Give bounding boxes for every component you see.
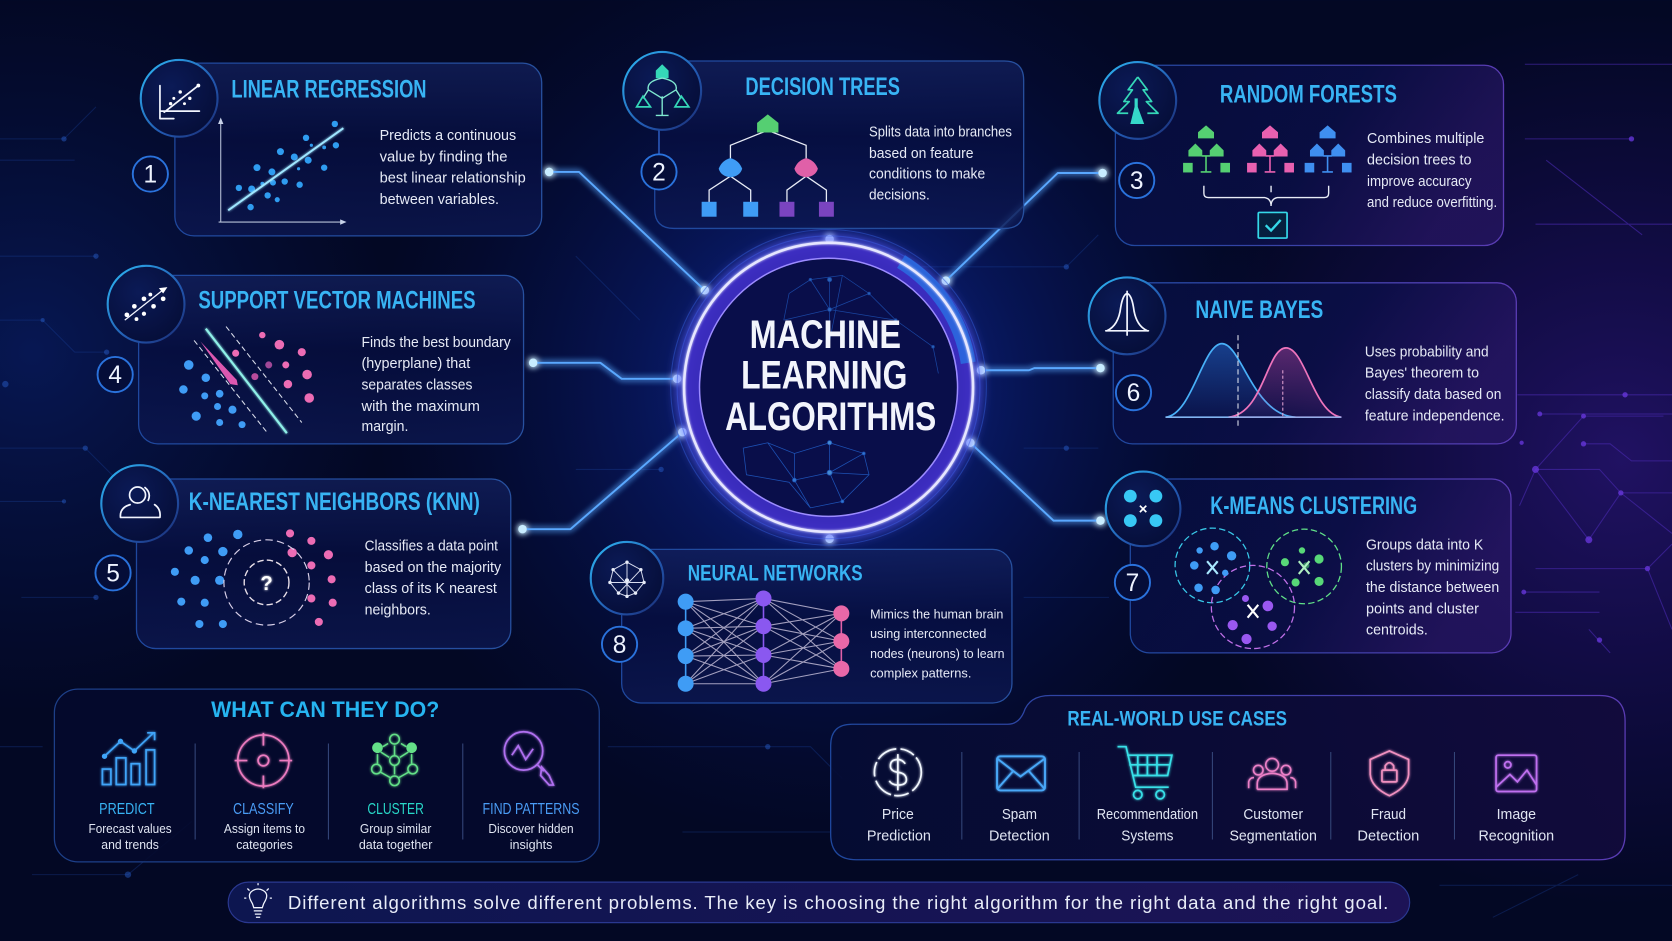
panel: decision trees — [623, 52, 1024, 228]
fraud detection item: Detection — [1357, 828, 1419, 845]
description: class of its K nearest — [365, 580, 498, 597]
number 5 — [95, 555, 131, 590]
classify item: categories — [236, 837, 293, 852]
number 8: 8 — [613, 632, 626, 659]
heading: LINEAR REGRESSION — [231, 76, 427, 103]
chart: ensemble trees — [1184, 126, 1351, 238]
description — [1365, 343, 1505, 424]
hub title: MACHINE — [750, 313, 901, 357]
panel: neural networks — [591, 542, 1012, 703]
image recognition item — [1478, 755, 1554, 845]
icon: neural sphere — [591, 542, 663, 614]
description — [380, 127, 526, 208]
panel: KNN — [95, 465, 511, 649]
predict item: PREDICT — [99, 801, 155, 818]
find patterns item: insights — [510, 837, 553, 852]
customer segmentation item — [1229, 758, 1317, 845]
number 7 — [1115, 565, 1150, 600]
customer segmentation item: Customer — [1243, 806, 1303, 823]
number 1 — [133, 156, 168, 192]
spam detection item: Spam — [1002, 806, 1037, 823]
description — [1367, 130, 1497, 211]
description: complex patterns. — [870, 665, 971, 680]
icon: SVM — [108, 266, 184, 343]
description: based on the majority — [365, 559, 502, 576]
description: nodes (neurons) to learn — [870, 646, 1004, 661]
image recognition item: Image — [1497, 806, 1536, 823]
description: the distance between — [1366, 579, 1499, 596]
icon: clusters — [1106, 472, 1180, 546]
icon: bell curve — [1089, 277, 1165, 354]
number 7: 7 — [1126, 570, 1139, 597]
central hub — [671, 230, 986, 545]
description: improve accuracy — [1367, 173, 1472, 190]
takeaway banner — [228, 882, 1410, 923]
number 2 — [641, 154, 677, 190]
description — [360, 334, 511, 435]
panel: random forests — [1099, 62, 1504, 246]
icon: people — [101, 465, 178, 542]
description: best linear relationship — [380, 170, 526, 187]
description: Mimics the human brain — [870, 607, 1003, 622]
customer segmentation item: Segmentation — [1229, 828, 1317, 845]
hub title: ALGORITHMS — [725, 395, 936, 439]
price prediction item: Prediction — [867, 828, 931, 845]
spam detection item: Detection — [989, 828, 1050, 845]
heading: SUPPORT VECTOR MACHINES — [198, 287, 476, 314]
cluster item: CLUSTER — [367, 801, 424, 818]
description: (hyperplane) that — [361, 355, 471, 372]
description: Bayes' theorem to — [1365, 365, 1479, 382]
number 4 — [98, 357, 133, 392]
number 3 — [1119, 163, 1154, 198]
heading: K-NEAREST NEIGHBORS (KNN) — [189, 489, 480, 516]
icon: decision tree — [623, 52, 701, 130]
panel: k-means clustering — [1106, 472, 1511, 653]
description: points and cluster — [1366, 600, 1479, 617]
description: neighbors. — [365, 601, 431, 618]
heading: WHAT CAN THEY DO? — [211, 697, 439, 722]
description: between variables. — [380, 191, 499, 208]
predict item — [89, 733, 172, 852]
description: with the maximum — [360, 398, 480, 415]
description: Classifies a data point — [365, 537, 499, 554]
chart: nearest neighbours — [171, 529, 337, 628]
description: and reduce overfitting. — [1367, 194, 1497, 211]
heading: RANDOM FORESTS — [1220, 82, 1397, 109]
number 1: 1 — [144, 162, 157, 189]
image recognition item: Recognition — [1478, 828, 1554, 845]
description: conditions to make — [869, 166, 985, 182]
description: based on feature — [869, 146, 974, 162]
number 5: 5 — [106, 560, 120, 587]
chart: clusters — [1175, 528, 1341, 649]
takeaway text: Different algorithms solve different problems. The key is choosing the right algorithm for the right data and the right goal. — [288, 892, 1388, 913]
description: using interconnected — [870, 626, 986, 641]
description: value by finding the — [380, 148, 508, 165]
brain network bottom — [743, 441, 869, 508]
find patterns item — [483, 732, 580, 852]
description: clusters by minimizing — [1366, 558, 1499, 575]
cluster item: data together — [359, 837, 433, 852]
number 6 — [1116, 375, 1151, 410]
chart: regression scatter — [218, 118, 347, 225]
chart: hyperplane — [179, 327, 314, 433]
classify item: Assign items to — [224, 821, 305, 836]
description: Splits data into branches — [869, 125, 1012, 141]
description: separates classes — [361, 376, 472, 393]
number 3: 3 — [1130, 168, 1144, 195]
connector lines — [518, 168, 1107, 543]
chart: neural network — [678, 590, 849, 692]
fraud detection item: Fraud — [1371, 806, 1406, 823]
icon: light bulb — [244, 883, 272, 917]
heading: NEURAL NETWORKS — [688, 560, 863, 585]
description: centroids. — [1366, 622, 1428, 639]
panel: linear regression — [133, 60, 542, 236]
description — [870, 607, 1004, 680]
description: Combines multiple — [1367, 130, 1484, 147]
hub title: LEARNING — [741, 353, 907, 397]
predict item: Forecast values — [89, 821, 172, 836]
cluster item — [359, 734, 433, 852]
chart: nearest neighbours: ? — [260, 573, 273, 595]
panel: support vector machines — [98, 266, 524, 444]
description — [869, 125, 1012, 204]
recommendation systems item — [1097, 747, 1198, 845]
number 6: 6 — [1127, 380, 1140, 407]
description: Finds the best boundary — [361, 334, 511, 351]
description: decision trees to — [1367, 151, 1472, 168]
spam detection item — [989, 756, 1050, 845]
brain network top — [784, 275, 938, 373]
heading: REAL-WORLD USE CASES — [1067, 706, 1287, 730]
number 8 — [602, 627, 637, 662]
description — [365, 537, 502, 618]
heading: K-MEANS CLUSTERING — [1210, 493, 1417, 520]
description: feature independence. — [1365, 407, 1505, 424]
hub title — [725, 313, 936, 439]
chart: decision tree — [702, 114, 834, 217]
price prediction item — [867, 749, 931, 845]
icon: scatter plot — [141, 60, 218, 137]
predict item: and trends — [101, 837, 159, 852]
price prediction item: Price — [882, 806, 914, 823]
recommendation systems item: Recommendation — [1097, 806, 1198, 823]
icon: forest — [1099, 62, 1176, 139]
description: Predicts a continuous — [380, 127, 516, 144]
find patterns item: Discover hidden — [488, 821, 574, 836]
recommendation systems item: Systems — [1121, 828, 1173, 845]
panel: naive bayes — [1089, 277, 1516, 444]
heading: NAIVE BAYES — [1195, 297, 1323, 324]
description: Groups data into K — [1366, 536, 1483, 553]
cluster item: Group similar — [360, 821, 432, 836]
description: margin. — [361, 418, 408, 435]
panel: real-world use cases — [831, 695, 1625, 860]
description: Uses probability and — [1365, 343, 1489, 360]
panel: what can they do — [54, 689, 599, 862]
classify item: CLASSIFY — [233, 801, 294, 818]
classify item — [224, 733, 305, 852]
heading: DECISION TREES — [745, 74, 900, 101]
number 4: 4 — [108, 362, 122, 389]
number 2: 2 — [652, 159, 666, 186]
description: classify data based on — [1365, 386, 1501, 403]
description: decisions. — [869, 188, 930, 204]
fraud detection item — [1357, 751, 1419, 845]
find patterns item: FIND PATTERNS — [483, 801, 580, 818]
description — [1366, 536, 1499, 639]
chart: distributions — [1165, 335, 1341, 429]
